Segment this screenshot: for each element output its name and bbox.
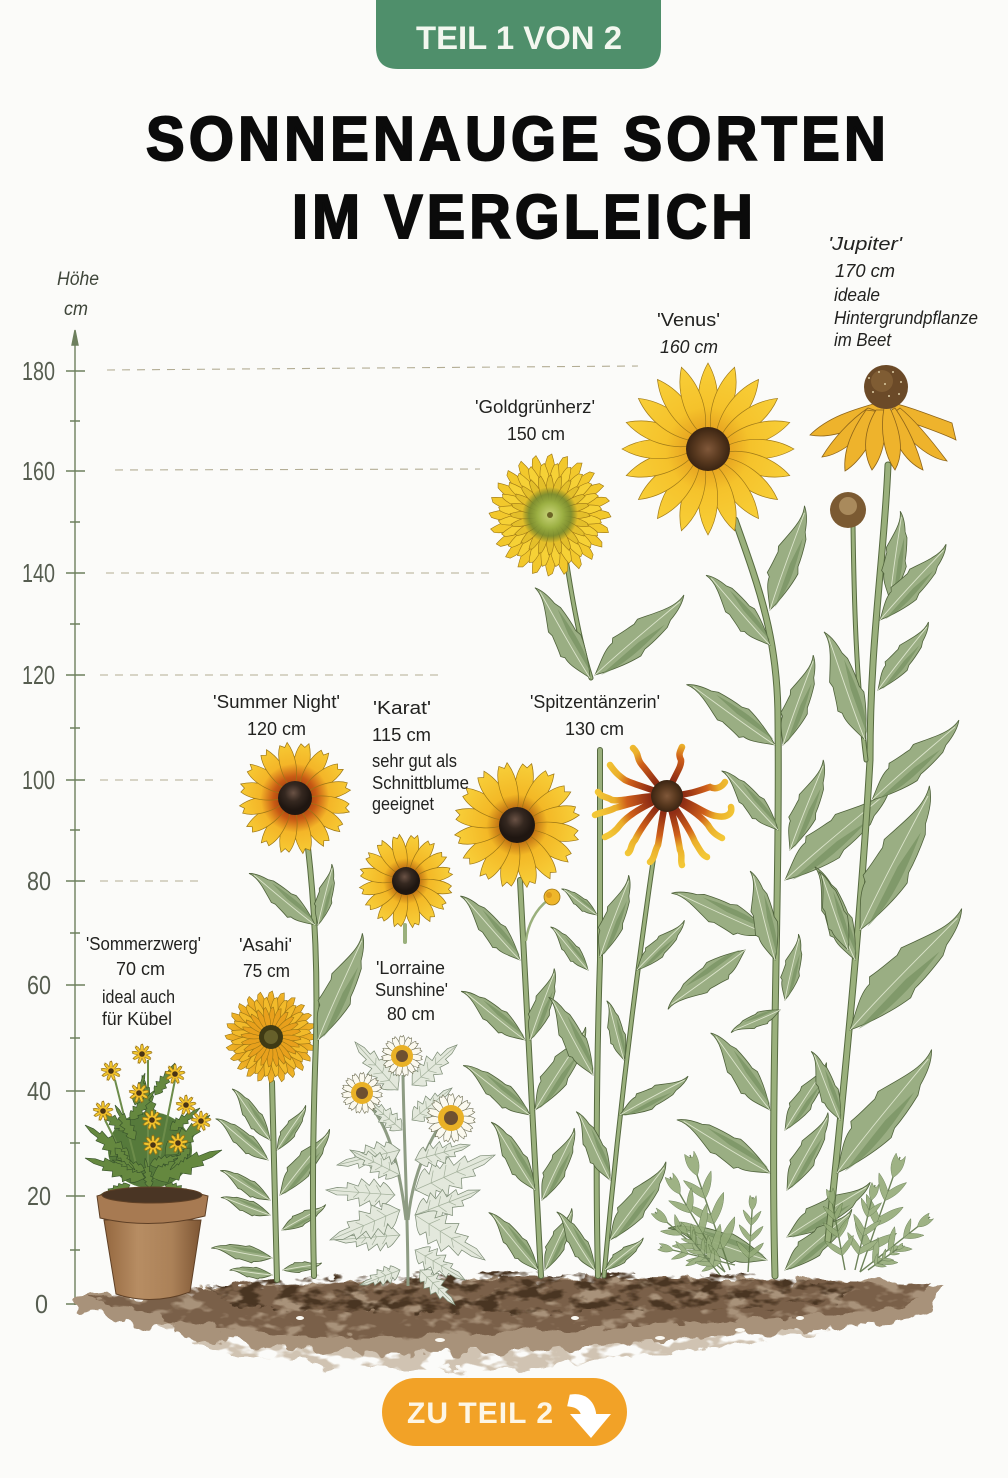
label: Goldgrünherz: 'Goldgrünherz'	[475, 397, 595, 417]
stem	[567, 565, 591, 678]
label: Karat	[372, 698, 469, 814]
leaves	[805, 510, 981, 1185]
stems	[372, 1075, 437, 1286]
leaves	[526, 579, 697, 686]
stem	[272, 1082, 277, 1280]
label: Jupiter: ideale	[834, 285, 880, 305]
label: Karat: Schnittblume	[372, 773, 469, 793]
label: Sommerzwerg: ideal auch	[102, 987, 175, 1007]
center	[651, 780, 683, 812]
label: Summer Night: 'Summer Night'	[213, 692, 340, 712]
plant: Goldgrünherz	[489, 454, 697, 686]
plant: feathery ground foliage	[643, 1146, 941, 1285]
soil	[68, 1273, 945, 1370]
axis numbers: 120	[22, 660, 55, 690]
silver leaves	[324, 1033, 502, 1312]
axis numbers: 140	[22, 558, 55, 588]
label: Asahi: 'Asahi'	[239, 935, 292, 955]
leaves	[659, 502, 905, 1278]
axis numbers: 100	[22, 765, 55, 795]
label: Asahi	[239, 935, 292, 981]
label: Spitzentänzerin: 'Spitzentänzerin'	[530, 692, 660, 712]
flower	[444, 752, 590, 898]
button: zu Teil 2	[382, 1378, 627, 1446]
banner: Teil 1 von 2: TEIL 1 VON 2	[416, 20, 622, 56]
label: Summer Night: 120 cm	[247, 719, 306, 739]
stem	[735, 520, 778, 1276]
axis numbers: 40	[27, 1076, 51, 1106]
leaves	[210, 1083, 340, 1281]
stems	[597, 750, 654, 1276]
axis numbers: 80	[27, 866, 51, 896]
axis line	[66, 330, 85, 1305]
stem	[520, 880, 548, 1276]
label: Jupiter	[828, 234, 978, 350]
label: Spitzentänzerin	[530, 692, 660, 739]
label: Jupiter: 170 cm	[835, 261, 895, 281]
axis numbers: 60	[27, 970, 51, 1000]
title: IM VERGLEICH	[292, 183, 757, 252]
foliage	[79, 1060, 226, 1200]
label: Sommerzwerg: 70 cm	[116, 959, 165, 979]
label: Asahi: 75 cm	[243, 961, 290, 981]
label: Lorraine Sunshine: Sunshine'	[375, 980, 448, 1000]
plant: Lorraine Sunshine	[324, 1033, 502, 1312]
label: Jupiter: im Beet	[834, 330, 892, 350]
icon: curved arrow	[569, 1396, 611, 1438]
plant: Summer Night	[229, 732, 380, 1276]
flower	[225, 991, 317, 1083]
label: Karat: 115 cm	[372, 725, 431, 745]
variety labels	[86, 234, 978, 1029]
plant: Sommerzwerg in pot	[79, 1044, 226, 1300]
label: Lorraine Sunshine	[375, 958, 448, 1024]
label: Karat: 'Karat'	[373, 698, 431, 718]
plant: Spitzentänzerin	[541, 747, 731, 1276]
bud	[830, 492, 866, 528]
stem	[308, 848, 317, 1276]
label: Goldgrünherz	[475, 397, 595, 444]
plant: Karat flower	[351, 826, 461, 942]
small yellow flowers	[93, 1044, 211, 1155]
label: Sommerzwerg: für Kübel	[102, 1009, 172, 1029]
flower	[489, 454, 611, 576]
bud	[544, 889, 560, 905]
plant: Jupiter	[805, 365, 981, 1240]
height axis with scale	[22, 269, 99, 1319]
leaves	[541, 872, 694, 1275]
leaves	[454, 886, 599, 1277]
stems	[828, 465, 888, 1240]
daisy flowers	[341, 1035, 476, 1143]
pot	[97, 1187, 208, 1300]
label: Venus: 160 cm	[660, 337, 718, 357]
label: Jupiter: 'Jupiter'	[828, 234, 903, 254]
axis numbers: 20	[27, 1181, 51, 1211]
axis title	[57, 269, 99, 320]
axis title: cm	[64, 299, 88, 320]
banner: Teil 1 von 2	[376, 0, 661, 69]
label: Lorraine Sunshine: 'Lorraine	[376, 958, 445, 978]
leaves	[244, 862, 380, 1046]
label: Venus	[657, 310, 720, 357]
label: Venus: 'Venus'	[657, 310, 720, 330]
plant: unnamed yellow rudbeckia	[444, 752, 599, 1277]
axis numbers: 180	[22, 356, 55, 386]
axis numbers: 160	[22, 456, 55, 486]
title: SONNENAUGE SORTEN	[146, 105, 890, 174]
label: Summer Night	[213, 692, 340, 739]
label: Karat: geeignet	[372, 794, 434, 814]
title	[146, 105, 890, 252]
label: Spitzentänzerin: 130 cm	[565, 719, 624, 739]
label: Goldgrünherz: 150 cm	[507, 424, 565, 444]
button: zu Teil 2: ZU TEIL 2	[407, 1397, 553, 1430]
flower	[622, 363, 794, 535]
plant: Asahi	[210, 991, 340, 1281]
label: Sommerzwerg	[86, 934, 201, 1029]
plant: Venus	[622, 363, 905, 1278]
label: Lorraine Sunshine: 80 cm	[387, 1004, 435, 1024]
label: Karat: sehr gut als	[372, 751, 457, 771]
label: Sommerzwerg: 'Sommerzwerg'	[86, 934, 201, 954]
label: Jupiter: Hintergrundpflanze	[834, 308, 978, 328]
seed cone	[864, 365, 908, 409]
axis numbers	[22, 356, 55, 1319]
drooping petals	[810, 402, 956, 471]
axis title: Höhe	[57, 269, 99, 290]
flower	[229, 732, 361, 864]
axis numbers: 0	[35, 1289, 48, 1319]
curly flower	[595, 747, 731, 865]
